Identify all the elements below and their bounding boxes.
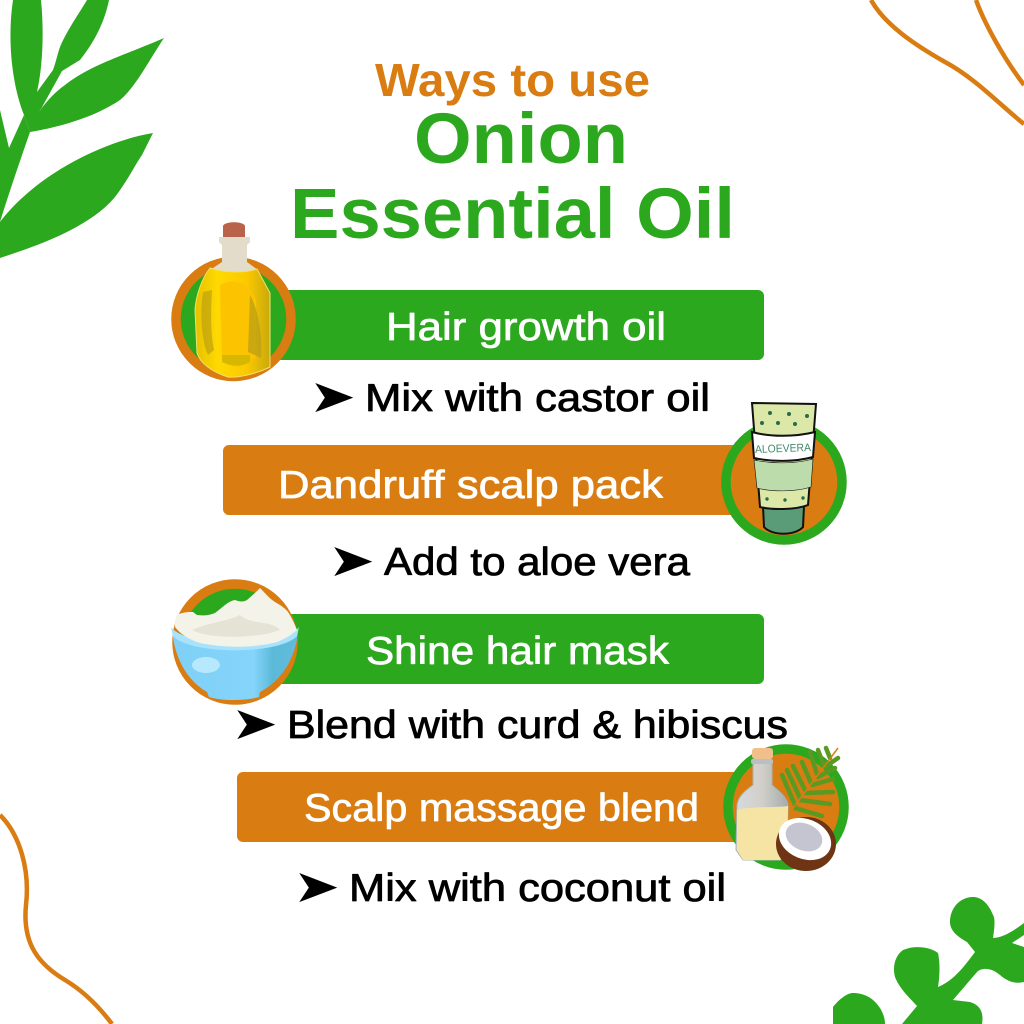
panel: hair growth oil: [176, 222, 764, 377]
panel: shine hair mask: [171, 584, 764, 700]
sub text: mix with castor oil: [309, 369, 710, 423]
title: [290, 54, 735, 254]
icon: bowl of curd: [171, 588, 299, 700]
banner: dandruff scalp pack: [223, 445, 753, 515]
title line: Ways to use: Ways to use: [375, 54, 650, 106]
instruction: Add to aloe vera: [384, 541, 690, 584]
instruction: Mix with coconut oil: [349, 867, 726, 910]
decoration: green branch bottom right: [833, 897, 1024, 1024]
banner: shine hair mask: [270, 614, 764, 684]
banner: scalp massage blend: [237, 772, 753, 842]
banner text: hair growth oil: Hair growth oil: [386, 306, 666, 349]
sub text: mix with coconut oil: [293, 859, 726, 913]
panel: scalp massage blend: [237, 748, 844, 871]
banner text: scalp massage blend: Scalp massage blend: [304, 787, 699, 830]
sub text: add to aloe vera: [328, 533, 690, 587]
decoration: orange curves top right: [871, 0, 1024, 124]
icon circle: [726, 424, 842, 540]
banner text: dandruff scalp pack: Dandruff scalp pack: [278, 464, 664, 507]
icon circle: [177, 584, 293, 700]
decoration: green leaf branch top left: [0, 0, 164, 258]
sub text: blend with curd and hibiscus: [231, 696, 788, 750]
icon: oil bottle: [195, 222, 270, 377]
icon circle: [728, 749, 844, 865]
tube label: ALOEVERA: [755, 442, 812, 456]
banner: hair growth oil: [270, 290, 764, 360]
instruction: Blend with curd & hibiscus: [287, 704, 788, 747]
arrow: ➤: [293, 859, 340, 913]
arrow: ➤: [309, 369, 356, 423]
icon: aloe vera tube: [752, 403, 816, 534]
icon circle: [176, 262, 291, 376]
banner text: shine hair mask: Shine hair mask: [366, 630, 670, 673]
title line: Essential Oil: Essential Oil: [290, 175, 735, 254]
instruction: Mix with castor oil: [365, 377, 710, 420]
arrow: ➤: [328, 533, 375, 587]
arrow: ➤: [231, 696, 278, 750]
panel: dandruff scalp pack: [223, 403, 842, 540]
title line: Onion: Onion: [414, 100, 628, 179]
icon: coconut oil bottle and palm leaf: [736, 748, 838, 871]
decoration: orange curve bottom left: [0, 815, 112, 1024]
